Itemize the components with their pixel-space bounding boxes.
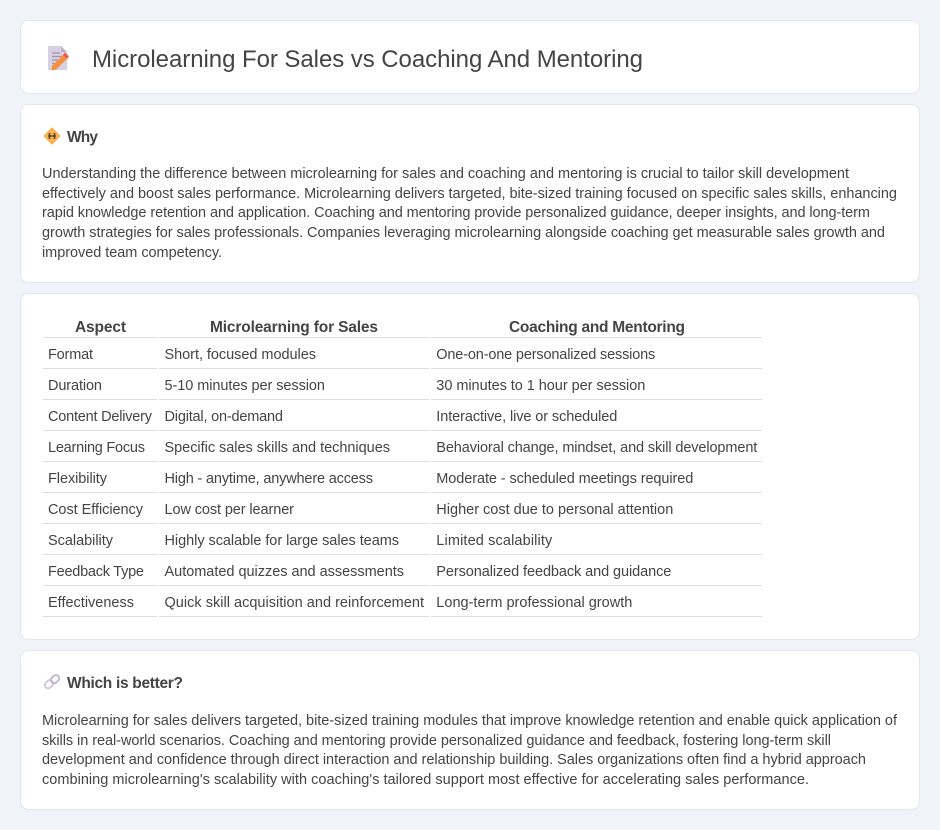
row: content delivery [43, 409, 762, 431]
row: flexibility: High - anytime, anywhere access [164, 471, 373, 487]
table header: Aspect [75, 319, 126, 336]
row: scalability: Highly scalable for large sales teams [164, 533, 399, 549]
row: format: Short, focused modules [164, 347, 316, 363]
panel: comparison table [20, 294, 920, 640]
text block: why paragraph: rapid knowledge retention and application. Coaching and mentoring provide personalized guidance, deeper insights, and long-term [42, 205, 870, 221]
row: flexibility: Moderate - scheduled meetings required [436, 471, 693, 487]
icon: memo with pencil [48, 46, 69, 70]
text block: which paragraph: development and confidence through direct interaction and relationship building. Sales organizations often find a hybrid approach [42, 752, 866, 768]
row: cost efficiency: Higher cost due to personal attention [436, 502, 673, 518]
row: feedback type: Personalized feedback and guidance [436, 564, 671, 580]
row: effectiveness: Quick skill acquisition and reinforcement [164, 595, 424, 611]
text block: why paragraph: effectively and boost sales performance. Microlearning delivers targeted, bite-sized training focused on specific sales skills, enhancing [42, 186, 897, 202]
row: format [43, 347, 762, 369]
row: effectiveness [43, 595, 762, 617]
row: learning focus: Behavioral change, mindset, and skill development [436, 440, 757, 456]
row: effectiveness: Effectiveness [48, 595, 134, 611]
row: flexibility [43, 471, 762, 493]
row: flexibility: Flexibility [48, 471, 108, 487]
title: Microlearning For Sales vs Coaching And Mentoring [92, 46, 643, 73]
panel: header [20, 20, 920, 94]
row: format: One-on-one personalized sessions [436, 347, 655, 363]
table header: Coaching and Mentoring [509, 319, 685, 336]
text block: which paragraph: combining microlearning's scalability with coaching's tailored support most effective for accelerating sales performance. [42, 772, 809, 788]
text block: why paragraph: Understanding the difference between microlearning for sales and coaching and mentoring is crucial to tailor skill development [42, 166, 849, 182]
row: cost efficiency [43, 502, 762, 524]
row: duration: 30 minutes to 1 hour per session [436, 378, 645, 394]
row: content delivery: Interactive, live or scheduled [436, 409, 617, 425]
row: feedback type [43, 564, 762, 586]
row: duration: Duration [48, 378, 102, 394]
panel: which is better [20, 650, 920, 810]
row: cost efficiency: Low cost per learner [164, 502, 294, 518]
heading: which is better: Which is better? [67, 675, 183, 692]
icon: orange diamond sign [44, 128, 60, 144]
row: scalability: Scalability [48, 533, 114, 549]
row: content delivery: Digital, on-demand [164, 409, 283, 425]
text block: which paragraph: skills in real-world scenarios. Coaching and mentoring provide personalized guidance and feedback, fostering long-term skill [42, 733, 831, 749]
row: learning focus: Specific sales skills and techniques [164, 440, 390, 456]
row: feedback type: Feedback Type [48, 564, 144, 580]
row: learning focus: Learning Focus [48, 440, 145, 456]
row: content delivery: Content Delivery [48, 409, 153, 425]
row: feedback type: Automated quizzes and assessments [164, 564, 404, 580]
text block: which paragraph: Microlearning for sales delivers targeted, bite-sized training modules that improve knowledge retention and enable quick application of [42, 713, 898, 729]
text block: why paragraph: improved team competency. [42, 245, 222, 261]
text block: which paragraph [42, 713, 898, 788]
row: scalability [43, 533, 762, 555]
icon: chain link [44, 674, 60, 690]
row: format: Format [48, 347, 93, 363]
row: effectiveness: Long-term professional growth [436, 595, 632, 611]
row: cost efficiency: Cost Efficiency [48, 502, 144, 518]
table header [43, 319, 762, 338]
panel: why [20, 104, 920, 282]
row: duration: 5-10 minutes per session [164, 378, 325, 394]
text block: why paragraph [42, 166, 897, 261]
table header: Microlearning for Sales [210, 319, 378, 336]
heading: why: Why [67, 129, 98, 146]
text block: why paragraph: growth strategies for sales professionals. Companies leveraging microlearning alongside coaching get measurable sales growth and [42, 225, 885, 241]
row: duration [43, 378, 762, 400]
row: learning focus [43, 440, 762, 462]
row: scalability: Limited scalability [436, 533, 553, 549]
